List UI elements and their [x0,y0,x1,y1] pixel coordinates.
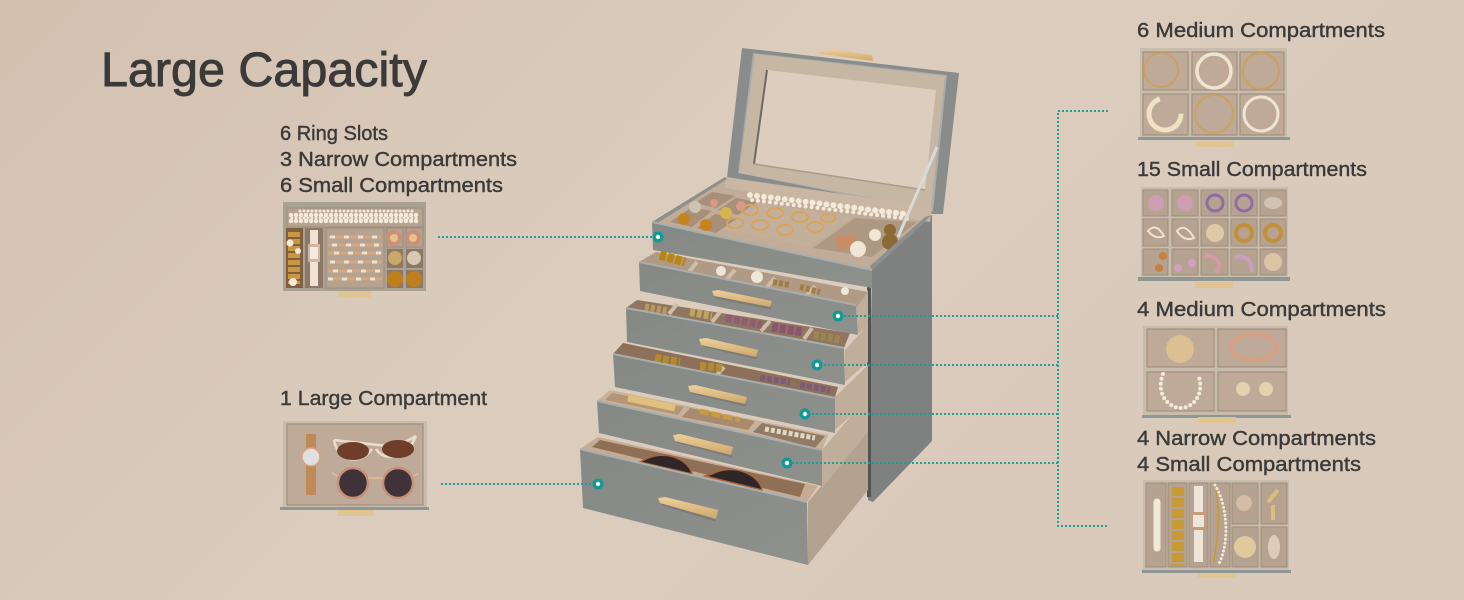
left label: ring slots tray: 3 Narrow Compartments [280,149,517,171]
drawer three [613,343,868,433]
connector: large drawer [441,483,592,485]
right label: narrow and small: 4 Narrow Compartments [1137,428,1376,450]
marker: top tray [652,232,664,242]
right label: 15 small: 15 Small Compartments [1137,159,1367,181]
thumbnail: 6 medium compartments [1138,48,1290,147]
right label: narrow and small [1137,428,1376,476]
marker: drawer two [812,360,822,370]
thumbnail: 15 small compartments [1138,187,1290,288]
drawer two [626,300,868,385]
title: Large Capacity [101,44,427,97]
box body side [868,215,932,502]
marker: drawer one [832,310,844,322]
drawer one [639,252,868,335]
right label: 6 medium: 6 Medium Compartments [1137,20,1385,42]
connector: top tray [438,236,652,238]
connector: right bracket [790,111,1108,526]
lid [727,48,959,214]
bottom drawer [580,430,868,565]
left label: ring slots tray [280,123,517,197]
left label: ring slots tray: 6 Small Compartments [280,175,503,197]
right label: 4 medium: 4 Medium Compartments [1137,299,1386,321]
top tray [652,147,937,288]
thumbnail: ring slot tray [283,202,426,297]
left label: large compartment: 1 Large Compartment [280,388,487,410]
thumbnail: 4 medium compartments [1142,326,1291,423]
jewelry box [580,48,959,565]
marker: bottom drawer [592,478,604,490]
marker: drawer three [800,408,810,420]
marker: drawer four [782,458,792,468]
drawer four [597,390,868,488]
thumbnail: large compartment tray [280,421,429,516]
right label: narrow and small: 4 Small Compartments [1137,454,1361,476]
thumbnail: narrow and small compartments [1142,480,1291,578]
left label: ring slots tray: 6 Ring Slots [280,123,388,145]
